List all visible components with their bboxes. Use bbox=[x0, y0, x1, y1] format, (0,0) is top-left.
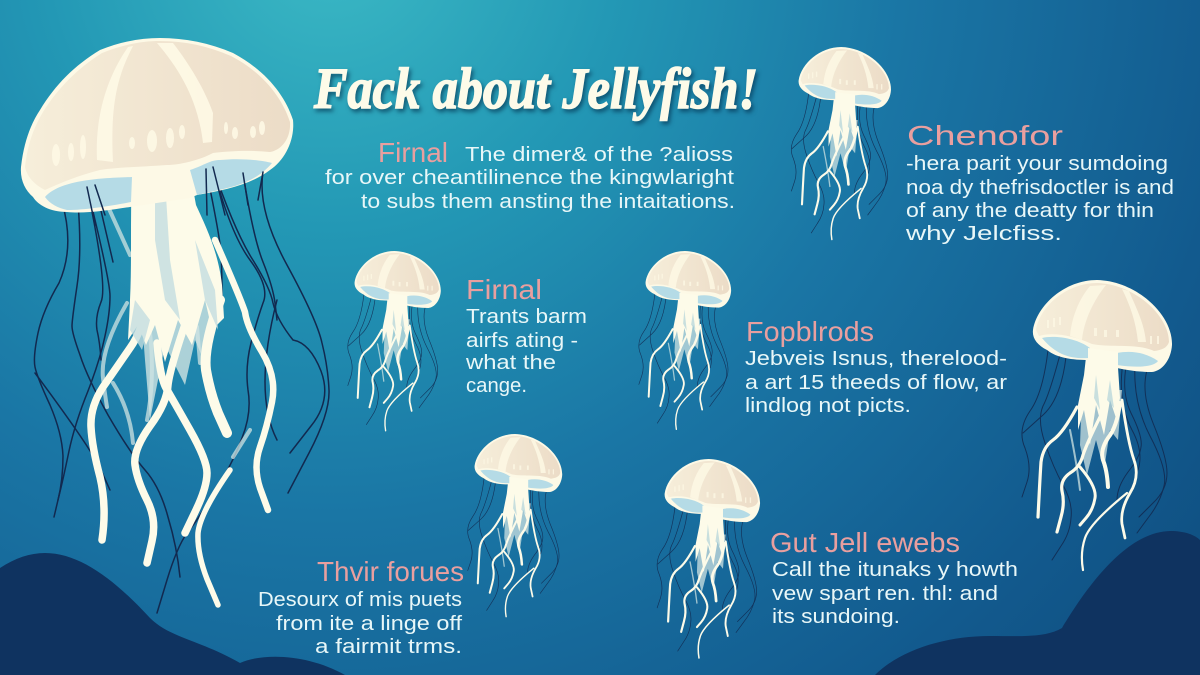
curtain shading bbox=[130, 180, 218, 350]
text block: middle left: Firnal bbox=[466, 274, 542, 305]
bell underside bbox=[45, 159, 272, 210]
dome stripes bbox=[97, 43, 213, 162]
text block: top right: noa dy thefrisdoctler is and bbox=[906, 176, 1174, 199]
text block: middle centre: Fopblrods bbox=[746, 316, 874, 347]
text block: bottom left: Desourx of mis puets bbox=[258, 588, 462, 611]
pale tentacles bbox=[103, 200, 250, 457]
text block: bottom left: a fairmit trms. bbox=[315, 635, 462, 658]
text block: bottom centre bbox=[770, 527, 1018, 628]
text block: bottom left: Thvir forues bbox=[317, 556, 464, 587]
text block: middle centre: a art 15 theeds of flow, ar bbox=[745, 371, 1007, 394]
text block: top centre: to subs them ansting the intaitations. bbox=[361, 190, 735, 213]
text block: top right: why Jelcfiss. bbox=[905, 222, 1062, 245]
text block: top centre: for over cheantilinence the kingwlaright bbox=[325, 166, 734, 189]
text block: middle left: Trants barm bbox=[466, 305, 587, 328]
small jellyfish: middle left bbox=[348, 251, 441, 431]
text block: bottom centre: Gut Jell ewebs bbox=[770, 527, 960, 558]
small jellyfish: bottom centre bbox=[657, 459, 760, 658]
thick cream tentacles bbox=[91, 240, 273, 605]
text block: middle left: airfs ating - bbox=[466, 329, 578, 352]
text block: top right: of any the deatty for thin bbox=[906, 199, 1154, 222]
small jellyfish: bottom left bbox=[468, 434, 562, 617]
text block: top right: Chenofor bbox=[907, 120, 1063, 151]
dome spots bbox=[52, 121, 265, 166]
jellyfish: right bbox=[1022, 280, 1172, 570]
text block: middle left bbox=[465, 274, 587, 397]
large jellyfish bbox=[21, 38, 329, 613]
text block: top centre bbox=[325, 137, 735, 213]
text block: middle centre bbox=[745, 316, 1007, 417]
text block: bottom centre: vew spart ren. thl: and bbox=[772, 582, 998, 605]
central oral curtain bbox=[128, 172, 224, 362]
bell dome bbox=[25, 41, 290, 190]
text block: top centre: The dimer& of the ?alioss bbox=[465, 143, 733, 166]
text block: middle centre: Jebveis Isnus, therelood- bbox=[745, 347, 1007, 370]
text block: bottom centre: Call the itunaks y howth bbox=[772, 558, 1018, 581]
text block: middle left: cange. bbox=[466, 374, 527, 397]
text block: middle centre: lindlog not picts. bbox=[745, 394, 911, 417]
text block: bottom left: from ite a linge off bbox=[276, 612, 462, 635]
text block: bottom centre: its sundoing. bbox=[772, 605, 900, 628]
hill: bottom left bbox=[0, 553, 345, 675]
small jellyfish: top right bbox=[791, 47, 891, 240]
hill: bottom right bbox=[875, 531, 1200, 675]
thin dark tentacles bbox=[34, 165, 329, 613]
title: Fack about Jellyfish! bbox=[313, 56, 758, 121]
bell bbox=[21, 38, 293, 213]
small jellyfish: middle centre bbox=[639, 251, 731, 429]
tentacle roots over the bell bbox=[87, 167, 263, 225]
bell outer rim bbox=[21, 38, 293, 213]
pale strand mass bbox=[140, 295, 215, 420]
text block: middle left: what the bbox=[465, 351, 556, 374]
text block: top right: -hera parit your sumdoing bbox=[906, 152, 1168, 175]
text block: top centre: Firnal bbox=[378, 137, 448, 168]
text block: bottom left bbox=[258, 556, 464, 658]
text block: top right bbox=[905, 120, 1174, 245]
